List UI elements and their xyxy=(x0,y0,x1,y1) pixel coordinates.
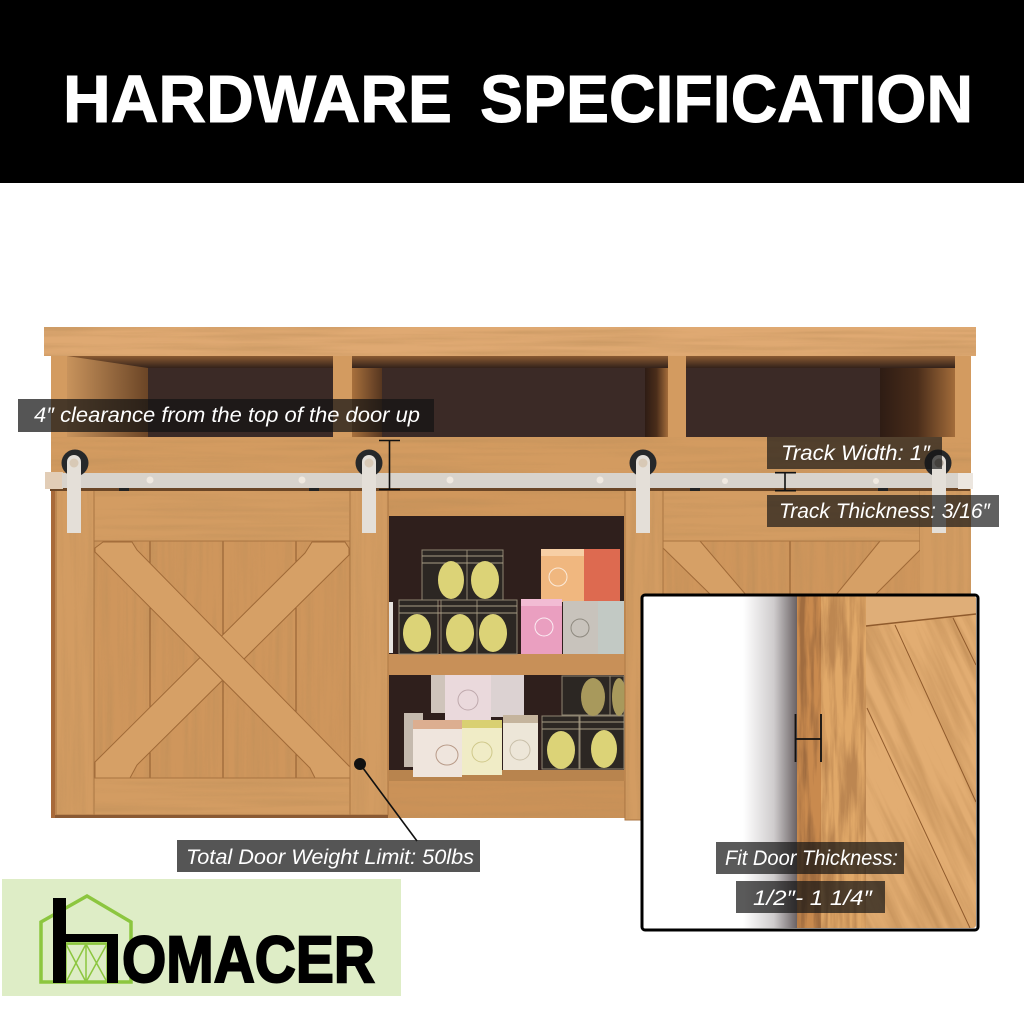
label: track width: Track Width: 1″ xyxy=(781,442,932,465)
door inner panel xyxy=(663,541,920,596)
hanger 1 xyxy=(62,450,88,533)
barn door track xyxy=(45,472,973,491)
tin oval labels xyxy=(403,561,626,769)
door panel with diagonal boards xyxy=(866,596,976,928)
coloured tins xyxy=(521,549,624,654)
title xyxy=(63,62,973,137)
brand logo xyxy=(2,879,401,996)
inset frame xyxy=(642,595,978,930)
door weight pointer xyxy=(354,758,417,841)
tin gold bands xyxy=(399,556,624,729)
edge shadow xyxy=(748,596,797,928)
label: track thickness xyxy=(767,495,999,527)
door stile xyxy=(821,596,866,928)
X brace xyxy=(95,542,350,778)
hanger 4 xyxy=(924,450,952,533)
door edge xyxy=(797,596,821,928)
centre shelves xyxy=(388,490,626,818)
icon: house outline xyxy=(41,896,131,982)
cabinet base shadow xyxy=(51,490,56,818)
inset: door thickness close-up xyxy=(640,594,980,932)
wordmark: OMACER xyxy=(122,922,375,996)
label: fit door thickness: Fit Door Thickness: xyxy=(725,847,898,870)
icon: green barn doors xyxy=(63,944,109,982)
X brace xyxy=(663,541,920,596)
middle open niche xyxy=(352,356,668,437)
clearance dimension marker xyxy=(379,440,400,490)
cabinet body xyxy=(51,350,971,818)
door frame rails and stiles xyxy=(56,490,388,815)
hanger hardware xyxy=(62,450,952,533)
track thickness dimension marker xyxy=(775,473,796,491)
letter H xyxy=(53,898,118,983)
label: fit door thickness xyxy=(716,842,904,874)
label: clearance: 4″ clearance from the top of the door up xyxy=(34,404,420,427)
right open niche xyxy=(686,356,955,437)
dark tins xyxy=(399,550,624,769)
left open niche xyxy=(67,356,333,437)
label: door weight limit: Total Door Weight Limit: 50lbs xyxy=(186,846,475,869)
title: SPECIFICATION xyxy=(480,62,973,137)
hanger 2 xyxy=(356,450,382,533)
label: thickness range: 1/2″- 1 1/4″ xyxy=(753,887,874,910)
label: thickness range xyxy=(736,881,885,913)
label: track width xyxy=(767,437,942,469)
door thickness dimension marker xyxy=(796,714,821,762)
title: HARDWARE xyxy=(63,62,452,137)
header wood grain xyxy=(51,437,971,487)
top board xyxy=(44,327,976,356)
label: clearance xyxy=(18,399,434,432)
hanger 3 xyxy=(630,450,656,533)
label: track thickness: Track Thickness: 3/16″ xyxy=(779,500,992,523)
right sliding door xyxy=(625,490,971,820)
header band xyxy=(0,0,1024,183)
door frame rails and stiles xyxy=(625,490,971,820)
cabinet xyxy=(44,327,976,820)
label: door weight limit xyxy=(177,840,480,872)
white boxes xyxy=(404,675,538,777)
left sliding door xyxy=(55,490,388,818)
tea tins xyxy=(389,549,626,777)
door inner panel xyxy=(94,541,350,778)
